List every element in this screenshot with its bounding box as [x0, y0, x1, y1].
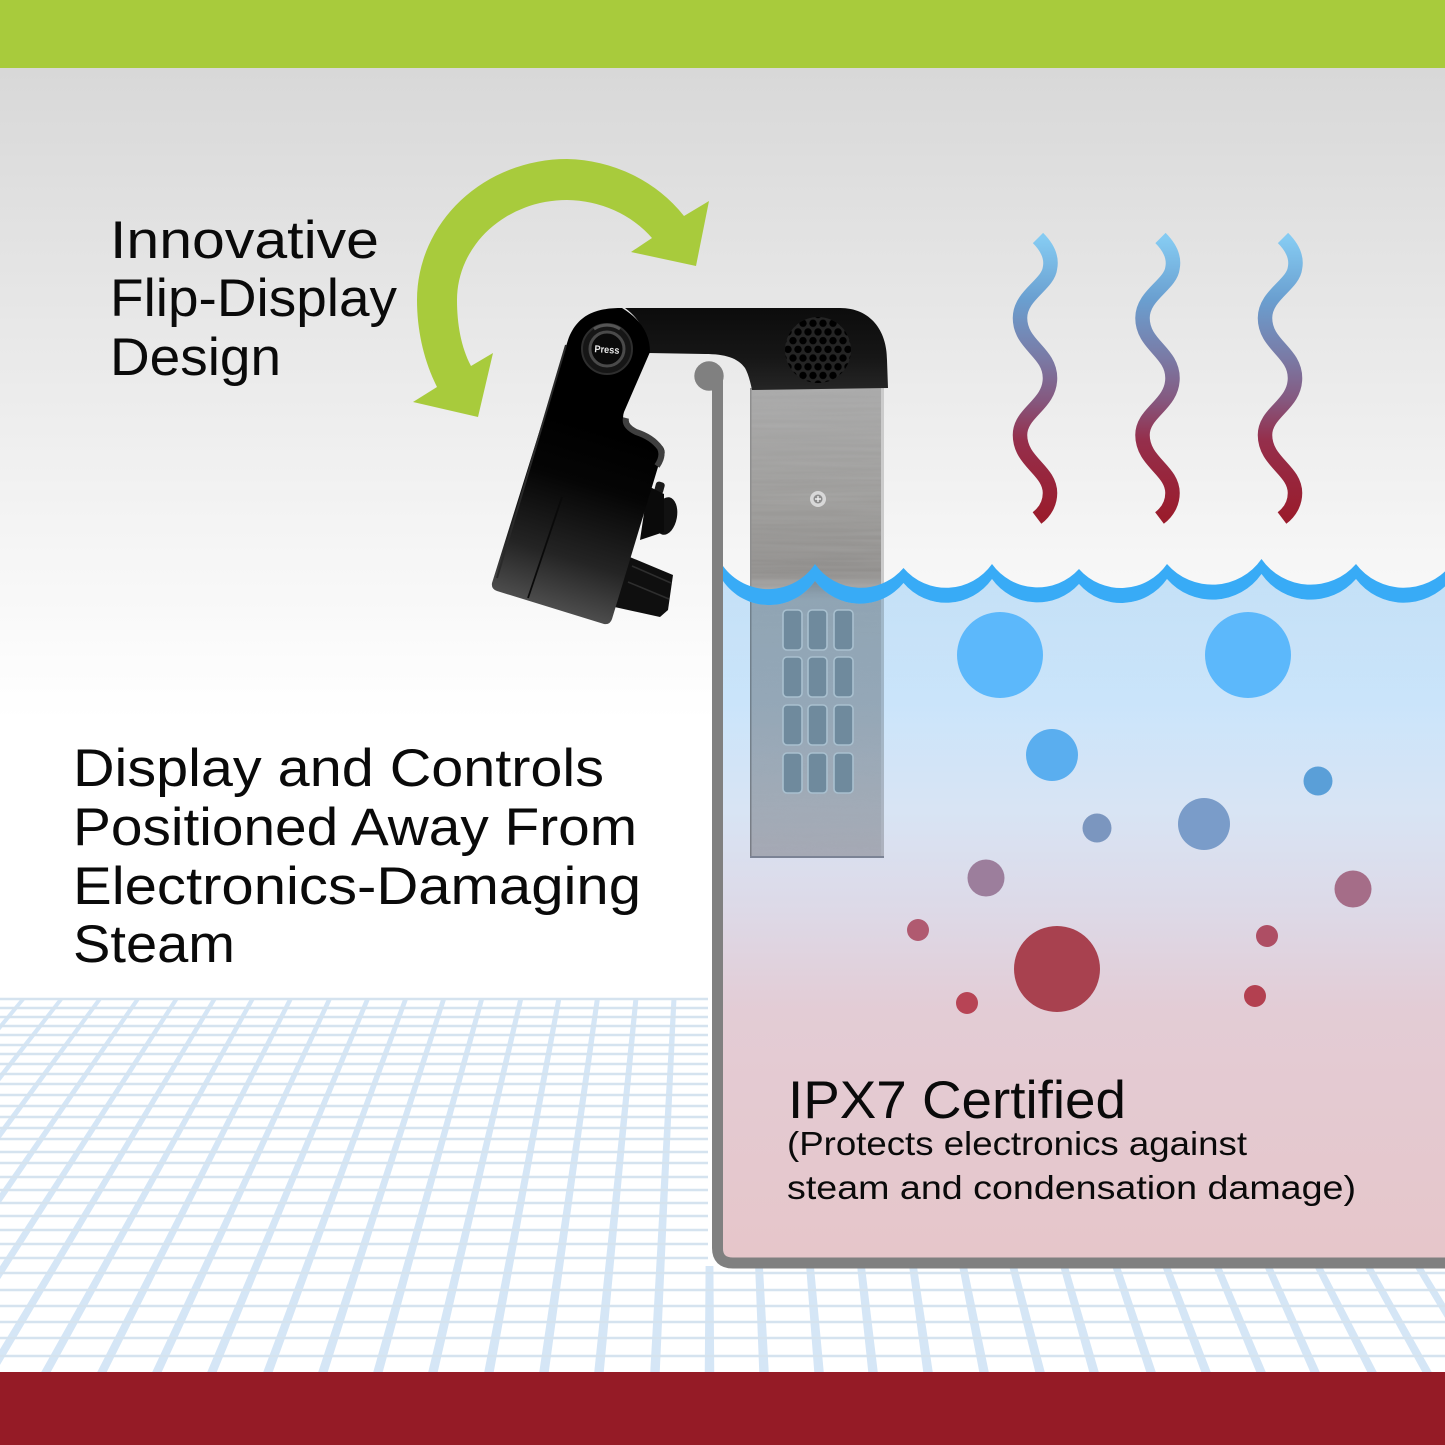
- text block: display and controls: Steam: [73, 915, 235, 974]
- heading: flip-display: Flip-Display: [110, 269, 398, 328]
- bottom red band: [0, 1372, 1445, 1445]
- text block: display and controls: Positioned Away From: [73, 798, 637, 857]
- tank wall: [694, 361, 1445, 1263]
- device arm: [625, 308, 888, 390]
- flip-display device: [492, 308, 888, 624]
- notch rim: [626, 418, 661, 466]
- heading: flip-display: Design: [110, 328, 281, 387]
- steam wave 1: [1020, 238, 1050, 518]
- steel vents: [783, 610, 853, 793]
- display body: [492, 308, 665, 624]
- top green band: [0, 0, 1445, 68]
- screw: [810, 491, 826, 507]
- press button: Press: [594, 344, 620, 357]
- tank water: [723, 574, 1445, 1258]
- certification text: [787, 1071, 1356, 1206]
- steam wave 2: [1142, 238, 1173, 518]
- certification text: IPX7 Certified: [788, 1071, 1126, 1130]
- text block: display and controls: Electronics-Damaging: [73, 857, 641, 916]
- text block: display and controls: Display and Controls: [73, 739, 604, 798]
- text block: display and controls: [73, 739, 641, 974]
- rear knob: [640, 481, 680, 540]
- certification text: steam and condensation damage): [787, 1169, 1356, 1206]
- flip arrow: [413, 159, 709, 417]
- water surface wave: [723, 559, 1445, 605]
- heading: flip-display: Innovative: [110, 211, 379, 270]
- steam wave 3: [1265, 238, 1296, 518]
- tiled floor grid: [0, 998, 1445, 1372]
- connector at device rear: [610, 555, 673, 617]
- stainless steel heating body: [750, 388, 884, 858]
- bubbles in water: [907, 612, 1372, 1014]
- certification text: (Protects electronics against: [787, 1125, 1247, 1162]
- speaker grille: [785, 317, 851, 383]
- heading: flip-display: [110, 211, 398, 387]
- press button: [582, 324, 632, 374]
